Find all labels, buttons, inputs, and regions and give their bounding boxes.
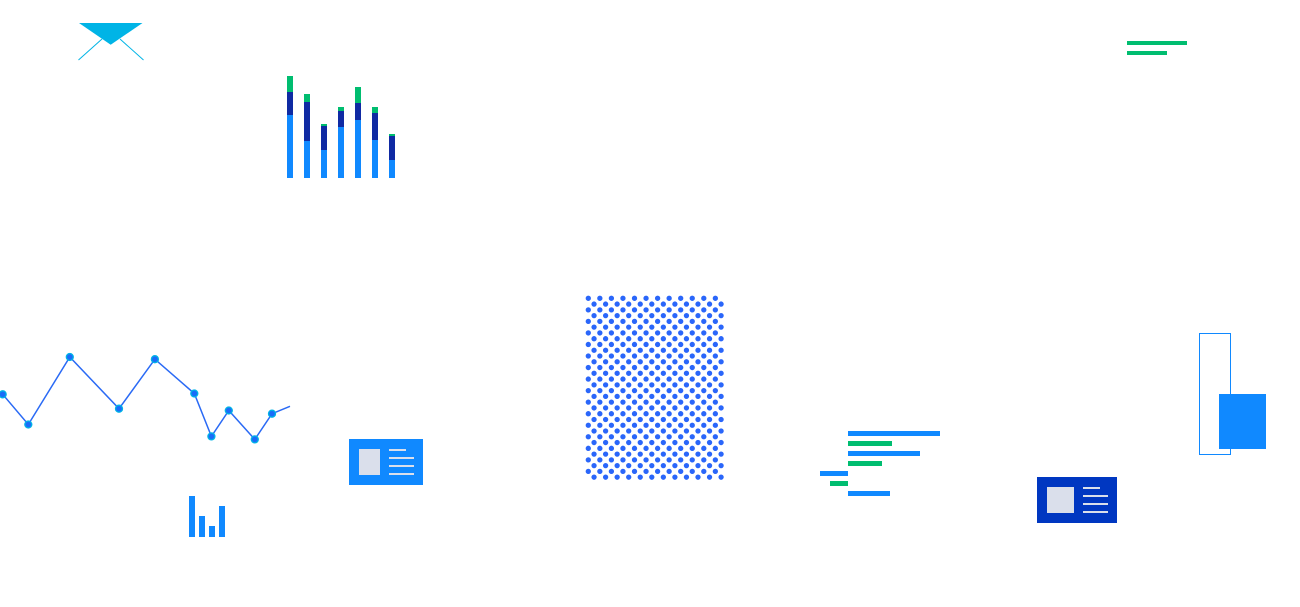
line chart xyxy=(0,354,290,443)
horizontal diverging bar chart xyxy=(820,431,940,496)
overlapping outline and filled rectangles xyxy=(1200,334,1266,454)
dot grid panel xyxy=(588,298,721,477)
icon: envelope xyxy=(78,23,144,60)
legend: green lines xyxy=(1127,41,1187,55)
card: light blue profile xyxy=(349,439,423,485)
small bar chart xyxy=(189,496,225,537)
card: dark blue profile xyxy=(1037,477,1117,523)
stacked bar chart xyxy=(287,76,395,178)
